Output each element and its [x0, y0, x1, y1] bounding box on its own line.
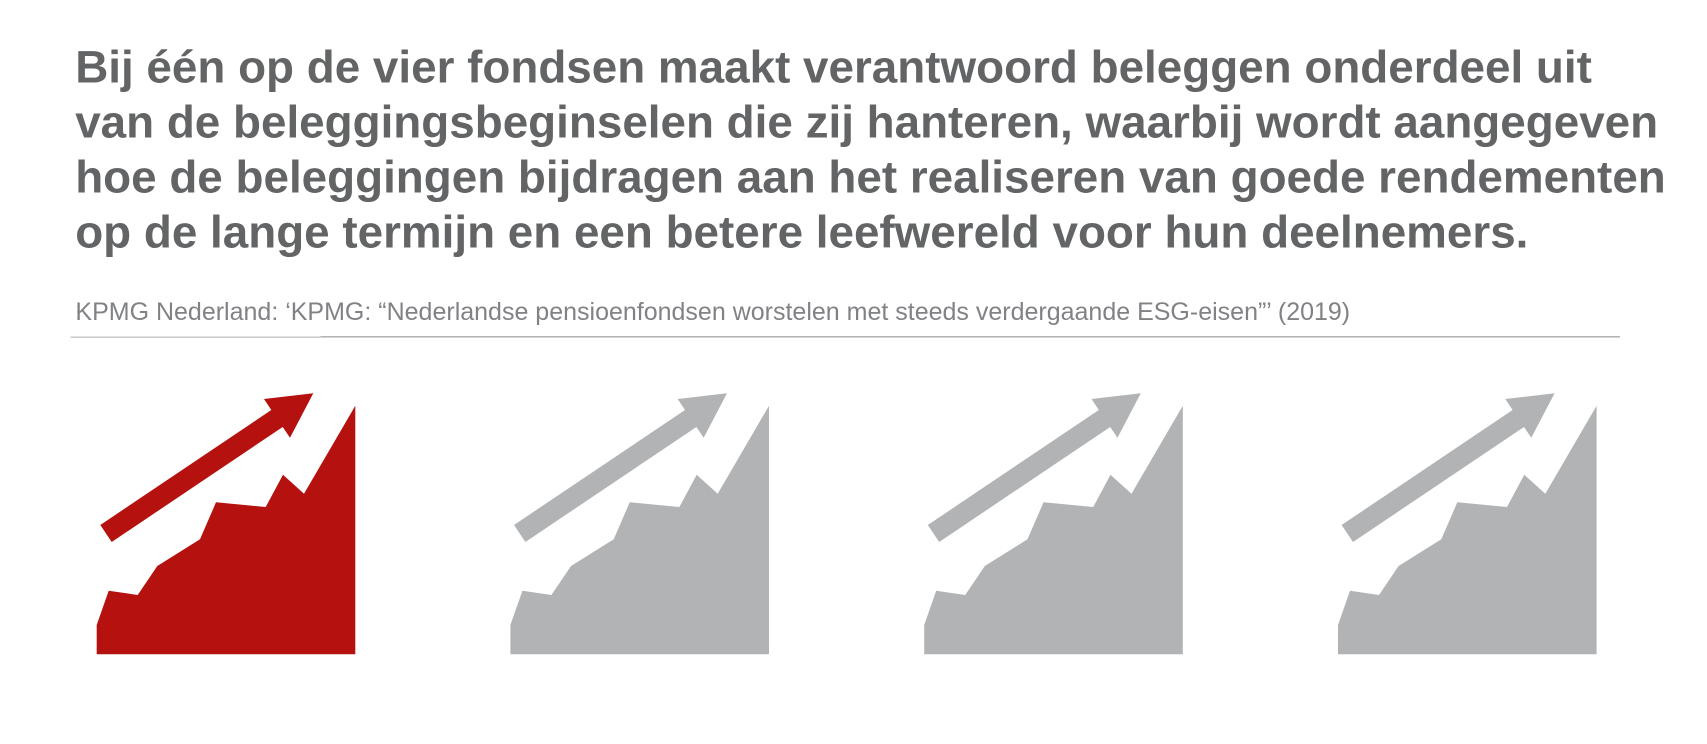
title: van de beleggingsbeginselen die zij hanteren, waarbij wordt aangegeven	[75, 97, 1658, 148]
title: hoe de beleggingen bijdragen aan het realiseren van goede rendementen	[75, 152, 1666, 203]
icon: red rising chart with arrow	[97, 393, 355, 654]
title: op de lange termijn en een betere leefwereld voor hun deelnemers.	[75, 207, 1528, 258]
title	[75, 42, 1666, 258]
title: Bij één op de vier fondsen maakt verantwoord beleggen onderdeel uit	[75, 42, 1592, 93]
icon: grey rising chart with arrow 4	[1338, 393, 1597, 654]
source citation: KPMG Nederland: ‘KPMG: “Nederlandse pensioenfondsen worstelen met steeds verdergaande ESG-eisen”’ (2019)	[75, 298, 1350, 326]
icon: grey rising chart with arrow 3	[924, 393, 1183, 654]
icon: grey rising chart with arrow 2	[510, 393, 769, 654]
